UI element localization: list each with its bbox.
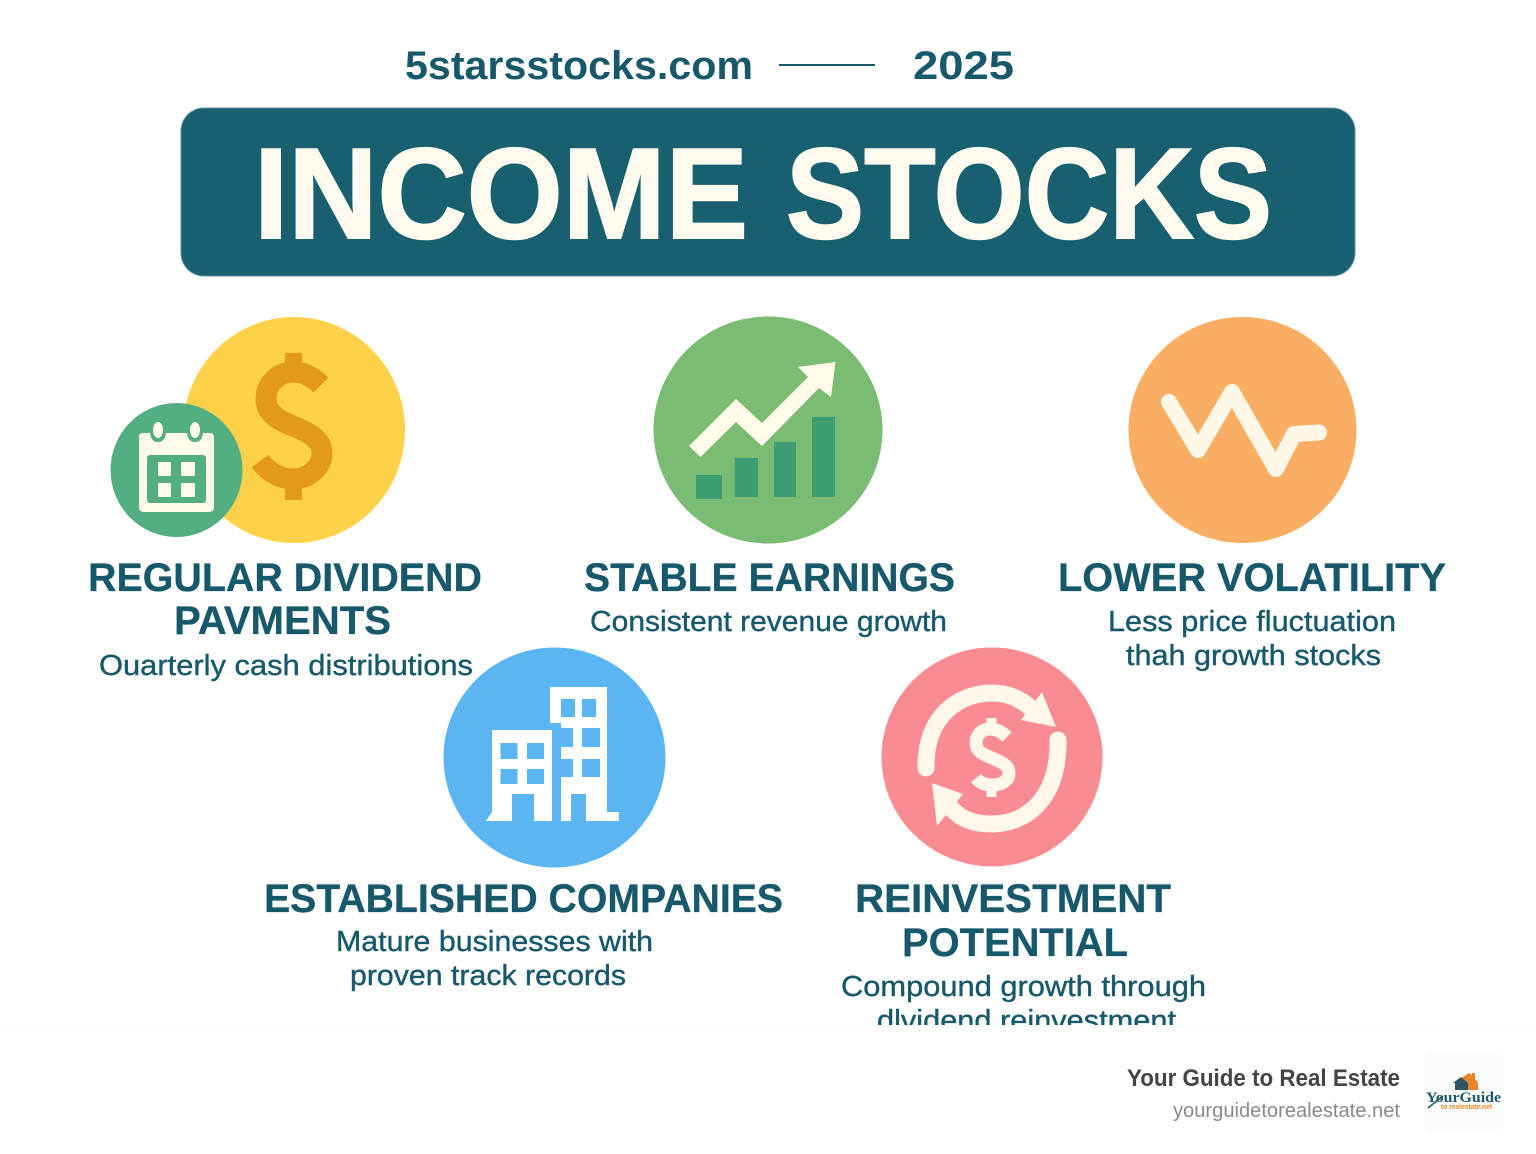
- footer brand name: Your Guide to Real Estate: [1127, 1065, 1400, 1092]
- icon: coin with dollar and calendar: [110, 317, 405, 543]
- heading: established companies: [264, 877, 783, 992]
- title banner: INCOME: [254, 122, 748, 266]
- heading: established companies: Mature businesses with: [336, 926, 653, 958]
- heading: stable earnings: STABLE EARNINGS: [584, 556, 955, 600]
- heading: lower volatility: [1058, 556, 1446, 672]
- footer logo: [1424, 1052, 1503, 1132]
- icon: dollar reinvestment cycle: [882, 648, 1102, 866]
- heading: established companies: proven track records: [350, 960, 626, 992]
- heading: lower volatility: thah growth stocks: [1126, 640, 1381, 672]
- heading: regular dividend payments: [88, 556, 482, 682]
- heading: stable earnings: Consistent revenue growth: [590, 606, 947, 638]
- heading: reinvestment potential: Compound growth through: [841, 971, 1206, 1003]
- heading: regular dividend payments: REGULAR DIVIDEND: [88, 556, 482, 600]
- heading: reinvestment potential: REINVESTMENT: [855, 877, 1171, 921]
- heading: stable earnings: [584, 556, 955, 638]
- heading: reinvestment potential: dlvidend reinvestment: [877, 1005, 1176, 1037]
- heading: regular dividend payments: PAVMENTS: [174, 599, 391, 643]
- footer url: yourguidetorealestate.net: [1173, 1100, 1400, 1122]
- footer logo: YourGuide: [1426, 1090, 1501, 1106]
- title banner: STOCKS: [786, 122, 1272, 266]
- icon: growth chart: [654, 316, 882, 544]
- icon: office buildings: [444, 648, 666, 868]
- heading: reinvestment potential: POTENTIAL: [902, 921, 1128, 965]
- icon: low volatility wave: [1128, 317, 1356, 543]
- header line: site and year: 5starsstocks.com: [405, 44, 753, 88]
- heading: lower volatility: Less price fluctuation: [1108, 606, 1396, 638]
- heading: reinvestment potential: [841, 877, 1206, 1037]
- footer bar: [0, 1025, 1536, 1154]
- heading: regular dividend payments: Ouarterly cash distributions: [99, 650, 473, 682]
- heading: lower volatility: LOWER VOLATILITY: [1058, 556, 1446, 600]
- footer logo: to realestate.net: [1441, 1104, 1493, 1111]
- title banner: [181, 108, 1355, 276]
- header line: site and year: [405, 44, 1014, 88]
- heading: established companies: ESTABLISHED COMPANIES: [264, 877, 783, 921]
- header line: site and year: 2025: [913, 44, 1014, 88]
